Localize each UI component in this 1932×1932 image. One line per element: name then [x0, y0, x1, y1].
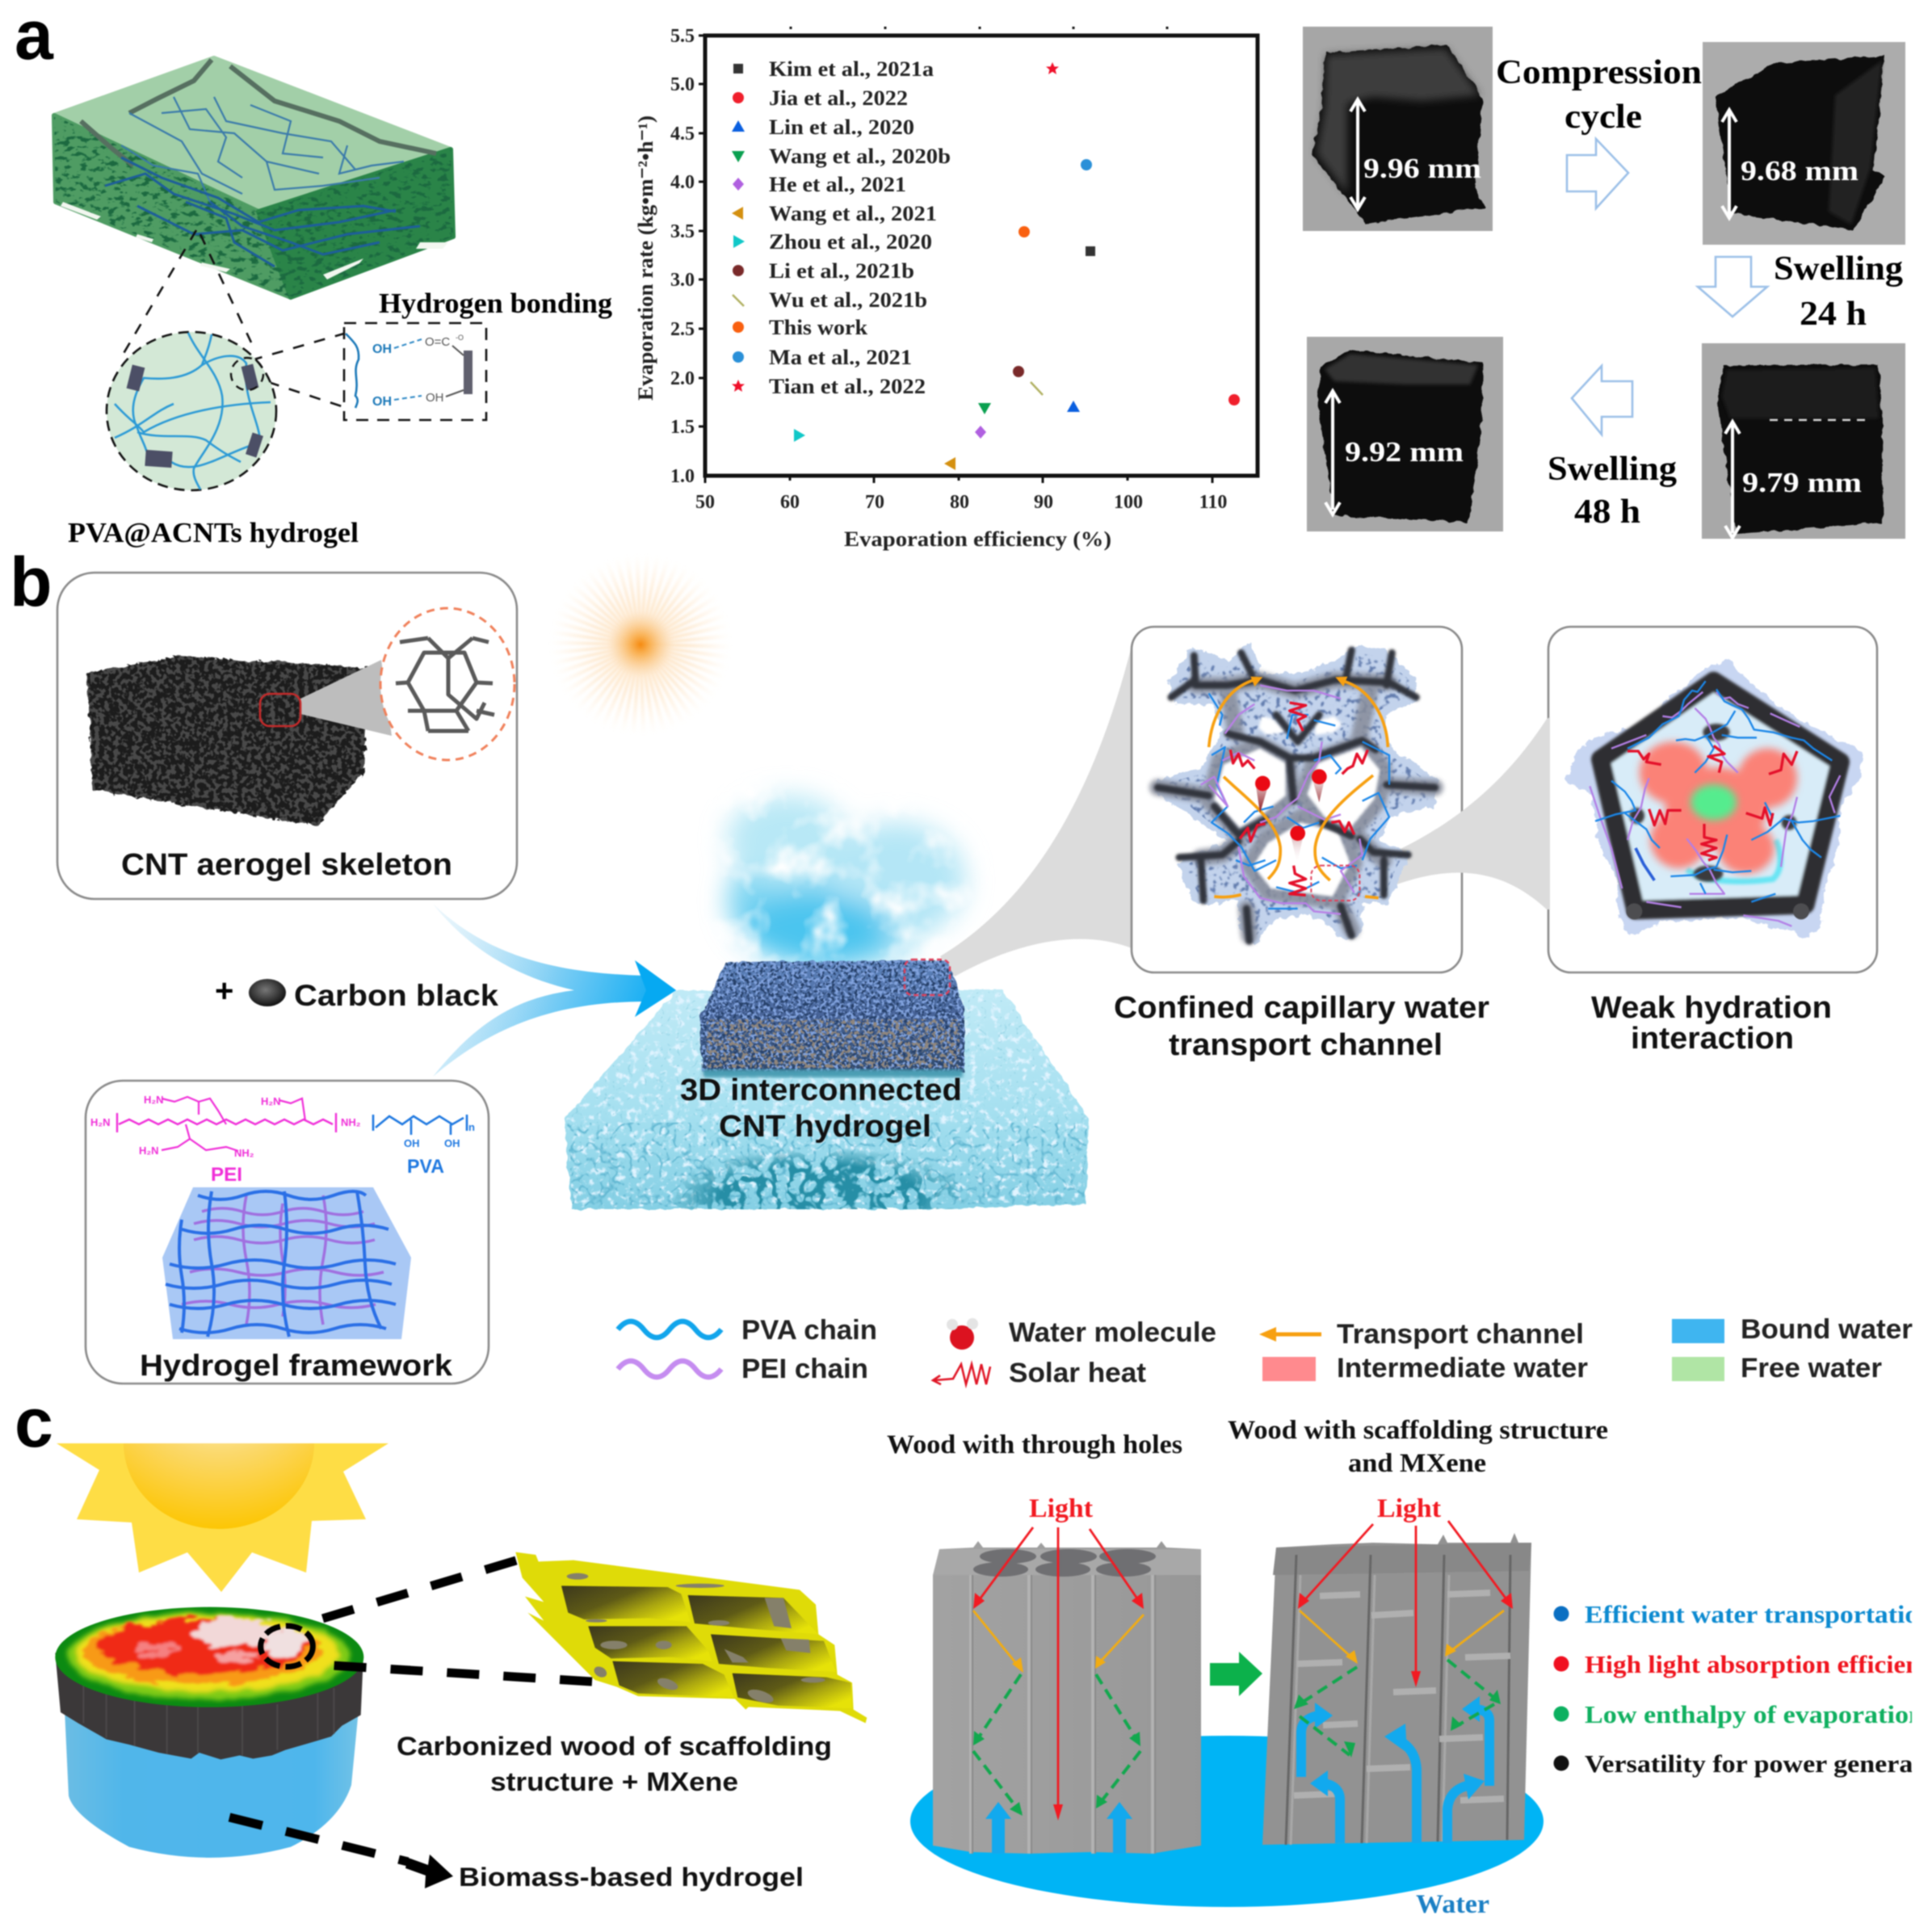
scatter chart: evaporation rate vs efficiency: 60 [780, 492, 800, 513]
scatter chart: evaporation rate vs efficiency: Lin et al., 2020 [769, 116, 914, 139]
vapor cloud [727, 796, 965, 969]
scatter chart: evaporation rate vs efficiency: Wu et al., 2021b [769, 288, 927, 312]
label: biomass-based hydrogel: Biomass-based hydrogel [459, 1863, 804, 1892]
photo: 9.92 mm cube: 9.92 mm [1345, 436, 1464, 468]
panel: confined capillary water transport channel [1132, 627, 1547, 972]
water-filled hydrogel base [565, 989, 1089, 1209]
intermediate water blobs [1640, 741, 1797, 874]
label: wood with scaffolding structure and MXene: Wood with scaffolding structure [1228, 1416, 1608, 1445]
scatter chart: evaporation rate vs efficiency: 100 [1114, 492, 1143, 513]
scatter chart: evaporation rate vs efficiency: 2.5 [670, 319, 695, 340]
advantage: power generation: Versatility for power generation [1585, 1749, 1932, 1778]
scatter chart: evaporation rate vs efficiency: 2.0 [670, 368, 695, 389]
label: carbonized wood: Carbonized wood of scaffolding [397, 1732, 832, 1761]
hydrogen bonding diagram: -O [456, 334, 464, 342]
PVA structure: n [468, 1121, 475, 1133]
label: swelling 48 h: 48 h [1574, 494, 1640, 531]
PVA structure: OH [444, 1137, 460, 1149]
photo: 9.96 mm cube: 9.96 mm [1363, 153, 1481, 184]
scatter chart: evaporation rate vs efficiency: 90 [1034, 492, 1053, 513]
carbon black label [215, 973, 498, 1012]
capillary network [1155, 642, 1438, 943]
carbon black label: + [215, 973, 233, 1009]
carbonized band [55, 1653, 363, 1759]
scatter chart: evaporation rate vs efficiency: 110 [1199, 492, 1227, 513]
panel: CNT aerogel skeleton: CNT aerogel skeleton [121, 848, 452, 882]
cylinder body [65, 1710, 359, 1858]
scatter chart: evaporation rate vs efficiency: He et al., 2021 [769, 173, 906, 196]
scatter chart: evaporation rate vs efficiency: 3.5 [670, 221, 695, 242]
scatter chart: evaporation rate vs efficiency: 70 [865, 492, 884, 513]
photo: 9.92 mm cube [1307, 337, 1503, 531]
label: 3D interconnected CNT hydrogel: 3D interconnected [680, 1073, 962, 1107]
panel: weak hydration interaction [1547, 627, 1877, 972]
scatter chart: evaporation rate vs efficiency: 5.5 [670, 26, 695, 47]
label: swelling 48 h: Swelling [1548, 451, 1677, 488]
water pool [910, 1736, 1544, 1907]
advantage: water transportation: Efficient water transportation [1585, 1600, 1932, 1628]
light rays [975, 1527, 1142, 1817]
pentagon cell [1565, 658, 1864, 937]
label: weak hydration interaction: interaction [1631, 1022, 1794, 1056]
legend: water molecule: Water molecule [1009, 1317, 1216, 1348]
hydrogen bonding diagram [344, 323, 486, 420]
legend: bound water [1672, 1314, 1913, 1345]
skeleton struts [1157, 650, 1435, 941]
hydrogen bonding diagram: O=C [425, 335, 450, 349]
polymer chains [1590, 692, 1840, 926]
sun illustration [57, 1443, 389, 1593]
water molecules [1255, 769, 1327, 864]
scatter chart: evaporation rate vs efficiency: Evaporation rate (kg•m⁻²•h⁻¹) [634, 116, 657, 401]
label: swelling 24 h [1774, 250, 1903, 333]
advantage: low enthalpy: Low enthalpy of evaporation [1585, 1700, 1924, 1728]
advantage: light absorption: High light absorption efficiency [1585, 1650, 1932, 1678]
scatter chart: evaporation rate vs efficiency: This work [769, 316, 868, 339]
scatter chart: evaporation rate vs efficiency: Ma et al., 2021 [769, 346, 912, 369]
soft gray body around struts [1157, 680, 1435, 935]
legend: solar heat: Solar heat [1009, 1358, 1146, 1388]
scatter chart: evaporation rate vs efficiency: 80 [950, 492, 969, 513]
label: compression cycle [1496, 54, 1702, 136]
legend: PEI chain [618, 1354, 868, 1384]
label: hydrogen bonding: Hydrogen bonding [379, 288, 613, 319]
scatter chart: evaporation rate vs efficiency: 4.5 [670, 124, 695, 145]
hydrogen bonding diagram: OH [372, 395, 392, 409]
scatter chart: evaporation rate vs efficiency: Li et al., 2021b [769, 259, 914, 283]
label: weak hydration interaction: Weak hydration [1591, 991, 1832, 1025]
label: swelling 24 h: 24 h [1800, 296, 1867, 333]
free water core [1690, 784, 1737, 820]
legend: PVA chain [618, 1315, 877, 1346]
scatter chart: evaporation rate vs efficiency: 5.0 [670, 74, 695, 95]
panel c label: c [15, 1384, 53, 1462]
yellow carbonized wood scaffold [515, 1552, 867, 1723]
panel: CNT aerogel skeleton [57, 573, 517, 899]
label: wood with scaffolding structure and MXene [1228, 1416, 1608, 1478]
label: confined capillary water transport channel [1114, 991, 1489, 1062]
orange sun burst [595, 599, 686, 690]
curved water-rise arrows [1301, 1709, 1489, 1843]
legend: free water: Free water [1741, 1353, 1882, 1384]
legend: intermediate water: Intermediate water [1337, 1353, 1588, 1384]
PEI structure [90, 1094, 361, 1186]
water-rise arrows [985, 1802, 1132, 1854]
hydrogel cylinder with heat map [55, 1607, 363, 1858]
arrow: compression to 9.68 [1567, 139, 1628, 208]
3D polymer network [162, 1187, 411, 1339]
arrow: swelling 48 h [1572, 366, 1632, 435]
label: confined capillary water transport channel: transport channel [1169, 1028, 1443, 1062]
hydrogen bonding diagram: OH [426, 391, 444, 405]
arrow: swelling 24 h [1698, 257, 1767, 317]
panel a: PVA@ACNTs hydrogel block [54, 58, 453, 297]
legend: transport channel: Transport channel [1337, 1319, 1584, 1350]
light rays [1300, 1521, 1511, 1683]
scatter chart: evaporation rate vs efficiency: 3.0 [670, 270, 695, 291]
PEI structure: NH₂ [234, 1147, 254, 1159]
legend: PVA chain: PVA chain [741, 1315, 877, 1346]
PEI structure: PEI [211, 1164, 242, 1186]
green dashed paths [1296, 1660, 1499, 1755]
label: wood with through holes: Wood with through holes [887, 1430, 1182, 1460]
dashed arrow to biomass hydrogel [229, 1817, 453, 1888]
photo: 9.68 mm cube [1703, 42, 1905, 245]
gray zoom cone to transport channel panel [940, 646, 1132, 976]
photo: 9.79 mm cube [1702, 343, 1905, 539]
solar heat zigzags [1230, 703, 1367, 895]
scatter chart: evaporation rate vs efficiency: 4.0 [670, 172, 695, 193]
reflected rays [973, 1611, 1144, 1670]
scatter chart: evaporation rate vs efficiency: 1.5 [670, 417, 695, 438]
PVA structure: PVA [407, 1156, 444, 1178]
gray zoom cone to hydration panel [1356, 719, 1547, 909]
reflected rays [1300, 1611, 1504, 1661]
PEI structure: H₂N [144, 1094, 164, 1106]
flow arrows into hydrogel [433, 904, 676, 1077]
legend [618, 1314, 1913, 1388]
green dashed paths [973, 1674, 1140, 1813]
polymer chains [1209, 693, 1389, 909]
advantage list [1554, 1600, 1932, 1778]
label: light left: Light [1029, 1494, 1093, 1523]
label: wood with scaffolding structure and MXene: and MXene [1348, 1449, 1486, 1478]
label: weak hydration interaction [1591, 991, 1832, 1056]
carbon black label: Carbon black [294, 979, 498, 1012]
legend: solar heat [933, 1358, 1146, 1388]
PVA structure: OH [404, 1137, 420, 1149]
cyan accent [1686, 840, 1780, 881]
legend: bound water: Bound water [1741, 1314, 1913, 1345]
green transition arrow [1210, 1652, 1262, 1696]
scatter chart: evaporation rate vs efficiency [634, 26, 1258, 551]
solar heat zigzags [1628, 746, 1797, 860]
scatter chart: evaporation rate vs efficiency: Zhou et al., 2020 [769, 230, 932, 254]
scatter chart: evaporation rate vs efficiency: Evaporation efficiency (%) [844, 527, 1111, 551]
hydrogen bonding diagram: OH [372, 342, 392, 356]
label: carbonized wood [397, 1732, 832, 1796]
scatter chart: evaporation rate vs efficiency: Jia et al., 2022 [769, 86, 908, 110]
scatter chart: evaporation rate vs efficiency: 1.0 [670, 466, 695, 487]
label: PVA@ACNTs hydrogel: PVA@ACNTs hydrogel [68, 517, 359, 548]
label: confined capillary water transport channel: Confined capillary water [1114, 991, 1489, 1025]
photo: 9.68 mm cube: 9.68 mm [1741, 155, 1858, 187]
panel b label: b [10, 544, 52, 621]
white pores [1214, 716, 1380, 897]
panel: hydrogel framework: Hydrogel framework [140, 1349, 452, 1382]
PEI structure: H₂N [90, 1116, 111, 1128]
PEI structure: NH₂ [341, 1116, 361, 1128]
heat map core [82, 1619, 321, 1682]
scatter chart: evaporation rate vs efficiency: Wang et al., 2020b [769, 145, 951, 168]
panel: hydrogel framework [86, 1081, 489, 1384]
label: carbonized wood: structure + MXene [490, 1767, 738, 1796]
label: light right: Light [1377, 1494, 1441, 1523]
wood with through holes diagram [933, 1527, 1201, 1854]
PEI structure: H₂N [139, 1144, 159, 1157]
strut junction nodes [1629, 724, 1796, 882]
label: compression cycle: cycle [1564, 99, 1642, 136]
label: 3D interconnected CNT hydrogel: CNT hydrogel [719, 1110, 931, 1144]
magnified hydrogel circle [107, 332, 276, 490]
PEI structure: H₂N [261, 1095, 281, 1107]
label: swelling 24 h: Swelling [1774, 250, 1903, 288]
heat map rim [55, 1607, 363, 1707]
legend: PEI chain: PEI chain [741, 1354, 868, 1384]
PVA structure [373, 1115, 475, 1178]
photo: 9.79 mm cube: 9.79 mm [1742, 467, 1862, 498]
label: water: Water [1416, 1890, 1489, 1919]
wood with scaffolding structure diagram [1262, 1521, 1531, 1845]
zoom dashed connector lines [120, 230, 344, 407]
scatter chart: evaporation rate vs efficiency: Kim et al., 2021a [769, 57, 934, 81]
label: compression cycle: Compression [1496, 54, 1702, 91]
photo: 9.96 mm cube [1303, 27, 1493, 231]
CNT hydrogel block [700, 960, 964, 1077]
label: 3D interconnected CNT hydrogel [680, 1073, 962, 1144]
scatter chart: evaporation rate vs efficiency: Wang et al., 2021 [769, 202, 937, 225]
transport channel arrows [1209, 680, 1388, 898]
label: swelling 48 h [1548, 451, 1677, 531]
scatter chart: evaporation rate vs efficiency: Tian et al., 2022 [769, 375, 926, 398]
legend: free water [1672, 1353, 1882, 1384]
scatter chart: evaporation rate vs efficiency: 50 [695, 492, 715, 513]
dashed callout lines to scaffold [306, 1560, 592, 1682]
